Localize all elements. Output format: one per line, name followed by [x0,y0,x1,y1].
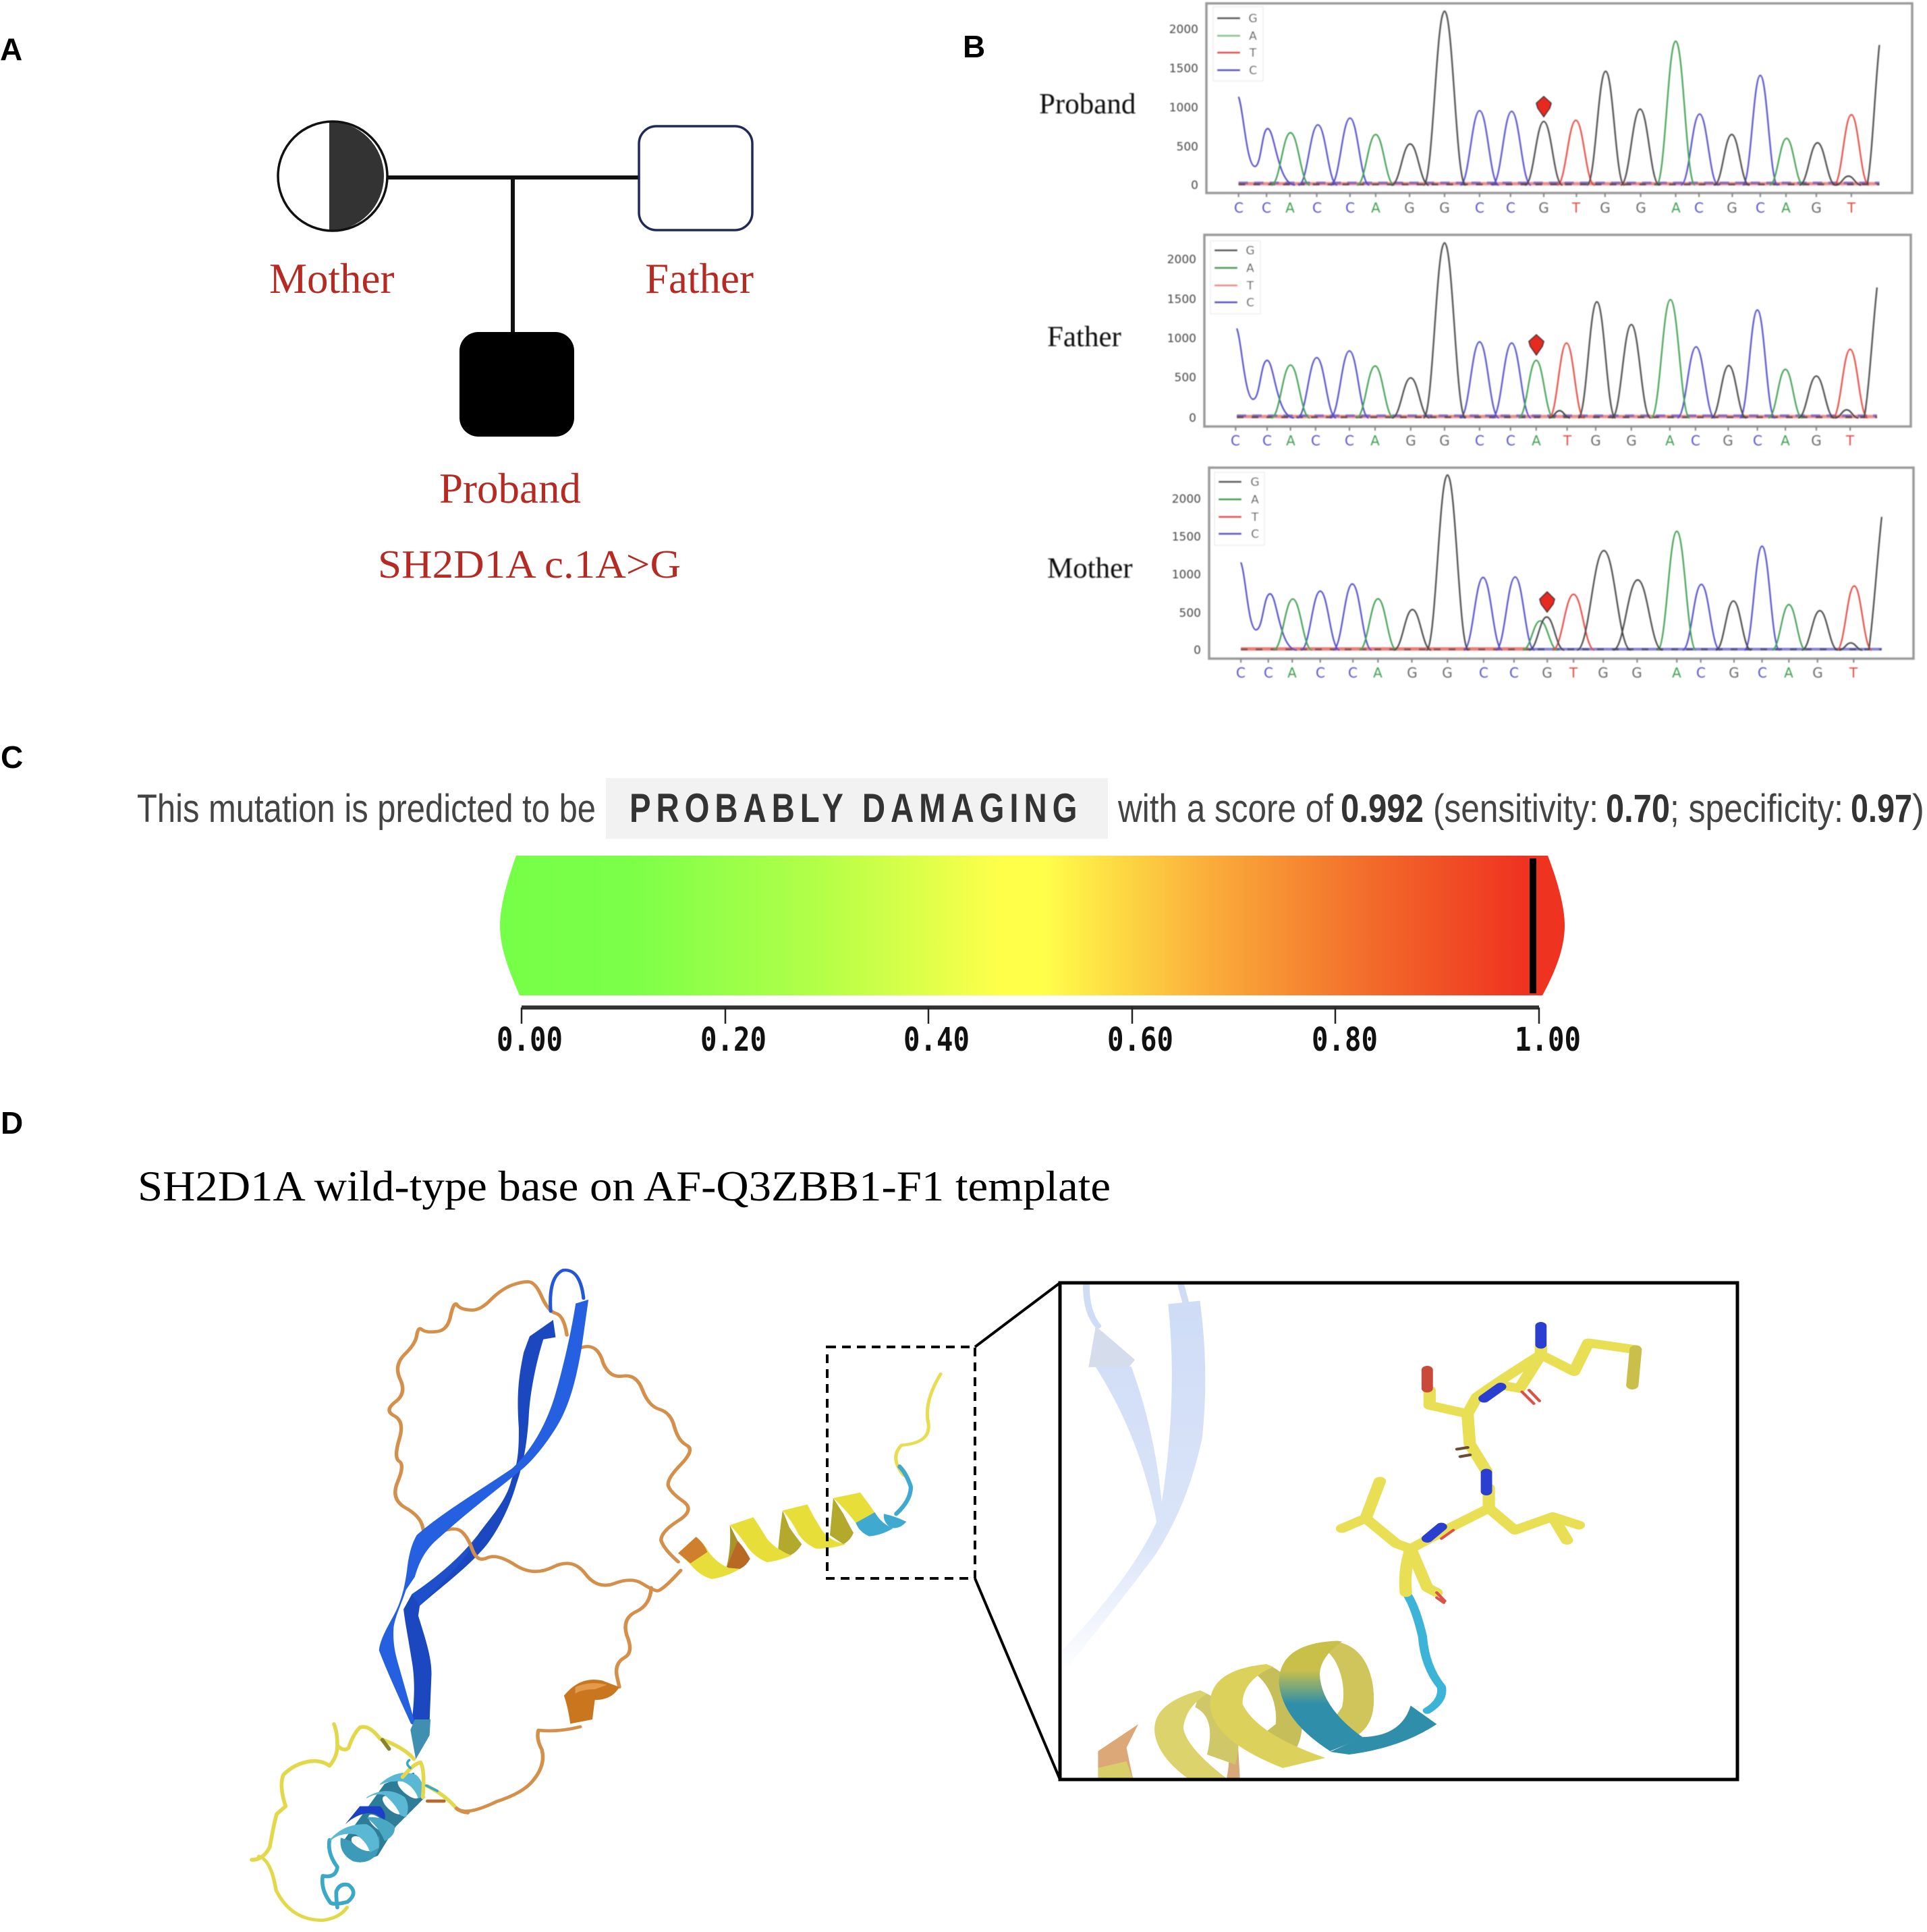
legend: A [1249,30,1257,43]
loops and beta hairpin [259,1270,941,1921]
name: Mother: Mother [1047,553,1133,584]
score marker [1530,858,1536,993]
y axis labels: 500 [1179,607,1201,620]
legend: C [1246,296,1254,310]
small orange helix [564,1680,619,1723]
score axis: 1.00 [1515,1021,1581,1059]
base calls: A [1784,665,1793,681]
label: Proband: Proband [439,465,581,512]
panel label A: A [0,32,22,67]
y axis labels [1169,23,1198,192]
base calls: C [1758,665,1767,681]
sentence end with scores: 0.97 [1851,787,1912,831]
base calls: C [1234,200,1244,216]
inset contents [1063,1285,1636,1785]
cyan coil [323,1840,354,1908]
base calls: A [1671,200,1681,216]
coil links [427,1796,444,1806]
base calls: T [1845,433,1855,449]
plot frame [1204,235,1911,426]
y axis labels [1172,493,1201,657]
base calls: G [1723,433,1733,449]
score axis: 0.20 [700,1021,766,1059]
y axis labels: 2000 [1169,23,1198,36]
base calls: G [1598,665,1609,681]
base calls: C [1756,200,1765,216]
icon: father open square [639,126,752,230]
base calls [1234,200,1856,216]
legend: G [1248,12,1258,26]
zoom connector lines [975,1283,1060,1779]
base calls: C [1506,200,1515,216]
icon: red arrow [1529,335,1544,355]
base calls: C [1264,665,1273,681]
base calls: G [1405,433,1416,449]
legend: T [1249,47,1257,60]
base calls: T [1571,200,1581,216]
score axis: 0.00 [497,1021,563,1059]
y axis labels: 500 [1177,140,1198,154]
base calls: G [1811,433,1822,449]
panel label B: B [963,29,985,64]
base calls: G [1631,665,1642,681]
score axis: 0.40 [903,1021,970,1059]
base calls: A [1665,433,1675,449]
stick heteroatoms [1427,1326,1541,1603]
stick residues [1342,1343,1636,1593]
helix bands [329,1773,423,1862]
name: Father: Father [1047,321,1121,353]
legend: G [1246,244,1255,258]
base calls: C [1262,200,1271,216]
y axis labels: 1000 [1167,332,1196,346]
traces [1235,243,1877,431]
y axis labels: 0 [1189,412,1196,425]
pale background strands [1069,1285,1205,1644]
base calls: A [1373,665,1383,681]
panel label D: D [1,1105,23,1140]
traces [1239,11,1879,197]
verdict box: PROBABLY DAMAGING [630,786,1082,831]
base calls: G [1442,665,1453,681]
inset frame [1060,1283,1737,1779]
label: Mother: Mother [269,255,394,302]
dashed zoom box [827,1347,975,1578]
score axis [497,1008,1581,1059]
y axis labels [1167,253,1196,425]
panel: zoomed inset [1060,1283,1737,1785]
base calls: G [1439,200,1450,216]
plot frame [1209,468,1914,659]
base calls: G [1636,200,1646,216]
base calls: T [1847,200,1856,216]
legend: T [1251,511,1259,524]
sentence end with scores: ) [1912,787,1924,831]
legend: T [1246,279,1254,293]
base calls: A [1532,433,1541,449]
base calls: T [1849,665,1858,681]
back strands [727,1498,854,1569]
cyan helix with coils [252,1724,468,1908]
base calls: C [1345,200,1355,216]
label: variant: SH2D1A c.1A>G [378,542,681,586]
orange loop over hairpin [461,1531,681,1591]
front strands [678,1493,875,1579]
chromatogram: father [1047,235,1911,449]
base calls: G [1811,200,1822,216]
score axis: 0.80 [1312,1021,1378,1059]
yellow C-terminal tail [896,1374,941,1475]
long yellow helix [678,1466,911,1579]
icon: red arrow [1536,96,1551,117]
y axis labels: 2000 [1172,493,1201,506]
heat bar [500,856,1565,995]
sentence end with scores: 0.70 [1606,787,1670,831]
cyan end [856,1466,911,1537]
sentence end with scores [1117,787,1924,831]
panel: pedigree [269,121,754,586]
base calls: C [1696,665,1706,681]
panel label C: C [1,740,23,775]
base calls: A [1672,665,1681,681]
legend: A [1246,262,1254,275]
verdict box [606,778,1108,839]
base calls: G [1626,433,1637,449]
sentence end with scores: ; specificity: [1670,787,1843,831]
base calls: C [1753,433,1762,449]
base calls: T [1563,433,1572,449]
icon: proband filled square [459,332,574,437]
legend [1213,7,1263,81]
base calls: A [1781,433,1790,449]
legend: G [1250,476,1260,489]
base calls: T [1569,665,1578,681]
orange start [678,1537,707,1564]
base calls: G [1407,665,1418,681]
blue beta hairpin [379,1270,588,1759]
sentence end with scores: with a score of [1117,787,1334,831]
legend [1214,472,1264,545]
helix openings [349,1777,422,1856]
sentence start: This mutation is predicted to be [137,787,596,831]
base calls: C [1316,665,1325,681]
panel: Sanger chromatograms [1039,3,1914,681]
lower yellow coil [259,1856,347,1921]
base calls: C [1262,433,1272,449]
base calls: G [1727,200,1737,216]
y axis labels: 1000 [1172,568,1201,582]
base calls: C [1311,433,1320,449]
base calls: G [1590,433,1601,449]
icon: red arrow [1540,592,1555,612]
base calls [1236,665,1858,681]
y axis labels: 0 [1194,644,1201,657]
protein structure ribbon [252,1270,941,1921]
legend: C [1249,64,1257,78]
y axis labels: 1500 [1167,293,1196,306]
base calls: A [1370,433,1380,449]
base calls: C [1694,200,1704,216]
panel: PolyPhen prediction [137,778,1924,1059]
pedigree connecting lines [385,177,639,332]
y axis labels: 1000 [1169,101,1198,115]
base calls: G [1600,200,1611,216]
base calls: C [1506,433,1515,449]
y axis labels: 500 [1175,371,1196,385]
sentence end with scores: 0.992 [1341,787,1424,831]
y axis labels: 1500 [1169,62,1198,76]
chromatogram: proband [1039,3,1912,216]
sentence end with scores: (sensitivity: [1433,787,1598,831]
base calls: C [1236,665,1246,681]
base calls: C [1475,433,1484,449]
yellow coils [252,1724,457,1860]
base calls: A [1781,200,1791,216]
base calls: G [1538,200,1549,216]
panel title: protein model: SH2D1A wild-type base on AF-Q3ZBB1-F1 template [138,1162,1111,1210]
y axis labels: 1500 [1172,530,1201,544]
base calls [1231,433,1855,449]
base calls: G [1542,665,1553,681]
cyan linker [1406,1593,1442,1711]
icon: mother half-filled circle [278,121,387,231]
base calls: G [1812,665,1823,681]
chromatogram: mother [1047,468,1914,681]
y axis labels: 0 [1191,179,1198,192]
base calls: G [1404,200,1415,216]
base calls: C [1231,433,1240,449]
base calls: C [1479,665,1488,681]
base calls: G [1729,665,1739,681]
helix turns [1098,1641,1436,1785]
plot frame [1206,3,1912,193]
helix core [344,1773,425,1862]
traces [1241,475,1882,663]
base calls: A [1285,200,1295,216]
legend: A [1251,493,1259,507]
y axis labels: 2000 [1167,253,1196,267]
base calls: C [1348,665,1358,681]
base calls: A [1287,665,1297,681]
name: Proband: Proband [1039,88,1136,120]
base calls: G [1439,433,1450,449]
orange loops [389,1281,690,1811]
base calls: A [1286,433,1295,449]
base calls: C [1475,200,1484,216]
legend [1210,241,1260,314]
base calls: C [1312,200,1322,216]
label: Father: Father [645,255,754,302]
score axis: 0.60 [1107,1021,1173,1059]
legend: C [1251,528,1259,541]
base calls: C [1345,433,1354,449]
base calls: C [1509,665,1519,681]
base calls: C [1691,433,1700,449]
base calls: A [1371,200,1380,216]
